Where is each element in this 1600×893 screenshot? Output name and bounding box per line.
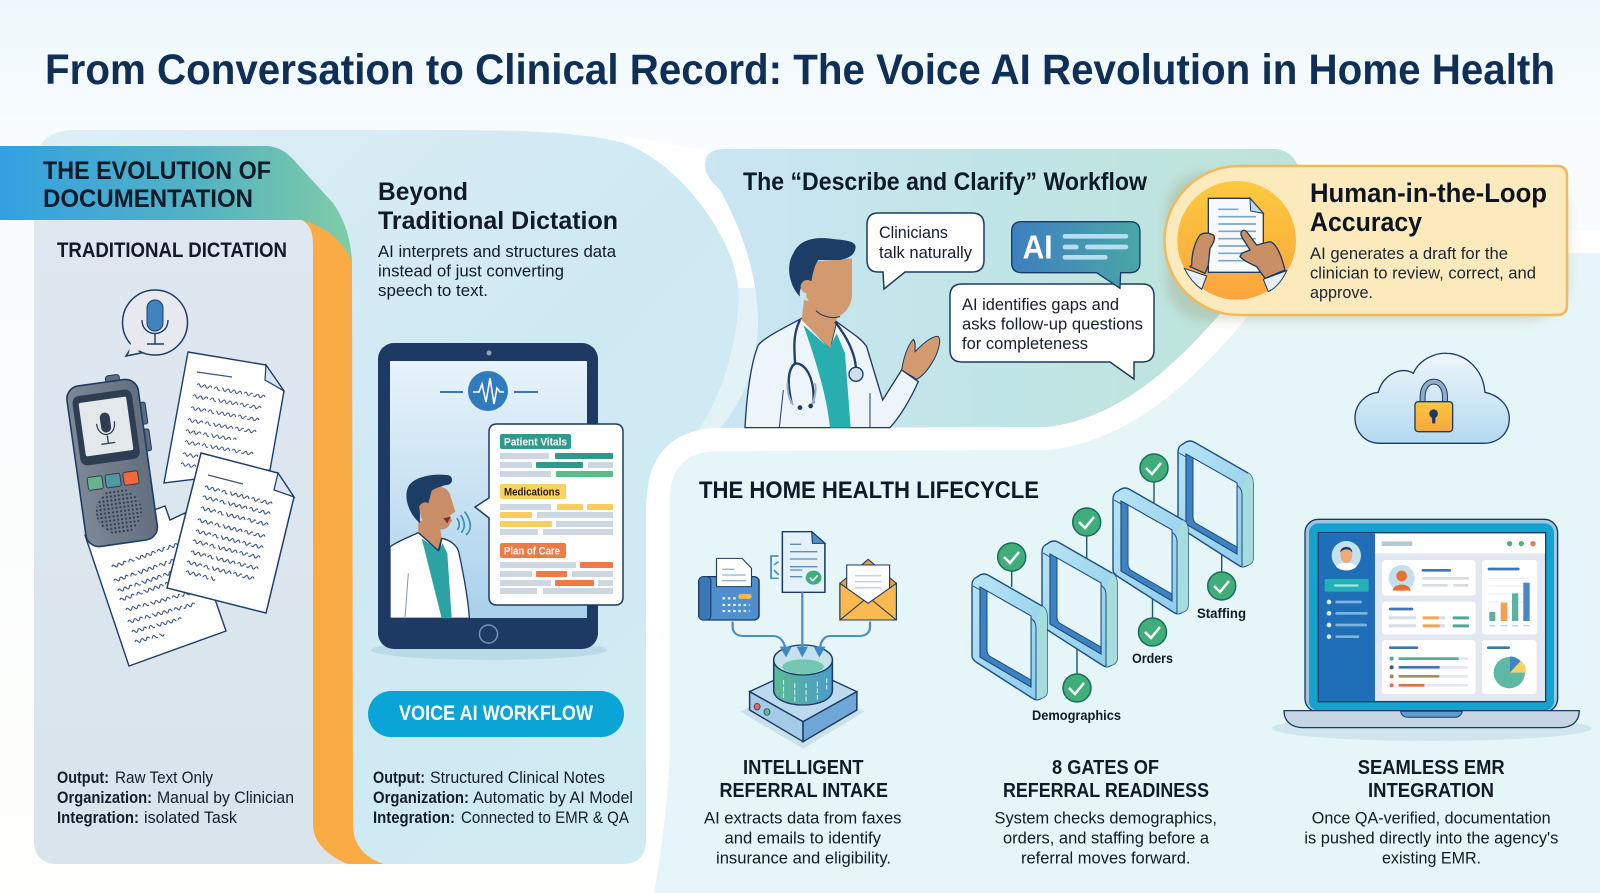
callout: ai identifies gaps <box>950 284 1154 379</box>
orange divider ribbon <box>302 220 384 864</box>
text block: voice ai attributes: Integration: <box>373 808 455 827</box>
banner: the evolution of documentation <box>0 146 352 262</box>
callout: clinicians talk naturally: Clinicians <box>879 223 948 242</box>
icon: voice waveform <box>440 371 538 411</box>
text block: intelligent referral intake: insurance and eligibility. <box>716 848 891 868</box>
button: voice ai workflow: VOICE AI WORKFLOW <box>399 702 593 725</box>
gate 3 <box>1113 488 1188 614</box>
text block: 8 gates of referral readiness: referral moves forward. <box>1021 848 1190 868</box>
text block: intelligent referral intake <box>704 757 902 868</box>
dashboard patient card <box>1382 560 1476 596</box>
icon: ai message bubble: AI <box>1023 229 1053 266</box>
text block: beyond traditional dictation: speech to text. <box>378 281 488 300</box>
panel: evolution of documentation background <box>34 130 739 864</box>
illustration: handwritten page front <box>167 453 294 613</box>
text block: traditional dictation attributes: Integration: <box>57 808 139 827</box>
banner: the evolution of documentation: DOCUMENTATION <box>43 185 253 213</box>
illustration: doctor gesturing <box>745 238 940 428</box>
gate 1 <box>972 574 1047 700</box>
label: demographics: Demographics <box>1032 707 1121 723</box>
icon: hands reviewing document <box>1177 181 1296 300</box>
panel: home health lifecycle background <box>654 253 1600 893</box>
icon: email envelope <box>840 559 896 620</box>
text block: voice ai attributes: Structured Clinical Notes <box>430 768 605 787</box>
heading: human-in-the-loop accuracy: Accuracy <box>1310 207 1422 237</box>
callout: clinicians talk naturally <box>867 213 984 289</box>
callout: ai identifies gaps: AI identifies gaps and <box>962 295 1119 314</box>
dashboard list card <box>1382 640 1476 694</box>
heading: traditional dictation: TRADITIONAL DICTATION <box>57 238 287 262</box>
icon: cloud with padlock <box>1355 353 1509 443</box>
text block: traditional dictation attributes: Manual by Clinician <box>157 788 294 807</box>
illustration: clinician speaking <box>390 475 470 618</box>
icon: dictaphone recorder <box>64 371 164 548</box>
gate 2 <box>1042 541 1117 667</box>
text block: traditional dictation attributes: Organization: <box>57 788 152 807</box>
icon: referral document <box>771 532 825 592</box>
text block: seamless emr integration: existing EMR. <box>1382 848 1481 868</box>
heading: describe and clarify workflow: The “Describe and Clarify” Workflow <box>743 168 1148 196</box>
text block: traditional dictation attributes: Output: <box>57 768 109 787</box>
text block: 8 gates of referral readiness: System checks demographics, <box>994 808 1217 828</box>
heading: human-in-the-loop accuracy <box>1310 178 1547 237</box>
text block: human review description: approve. <box>1310 283 1373 302</box>
heading: human-in-the-loop accuracy: Human-in-the-Loop <box>1310 178 1547 208</box>
text block: intelligent referral intake: and emails to identify <box>724 828 881 848</box>
panel: describe and clarify workflow background <box>705 149 1300 428</box>
arrows into database <box>733 592 870 657</box>
text block: voice ai attributes: Connected to EMR & QA <box>461 808 630 827</box>
text block: intelligent referral intake: INTELLIGENT <box>743 757 864 779</box>
text block: voice ai attributes <box>373 768 633 827</box>
text block: traditional dictation attributes <box>57 768 294 827</box>
text block: intelligent referral intake: AI extracts data from faxes <box>704 808 902 828</box>
dashboard pie chart <box>1482 640 1537 694</box>
label: medications: Medications <box>504 486 560 498</box>
text block: seamless emr integration <box>1304 757 1558 868</box>
text block: seamless emr integration: SEAMLESS EMR <box>1358 757 1505 779</box>
illustration: laptop with emr dashboard <box>1272 519 1592 741</box>
gate 4 <box>1178 441 1253 567</box>
text block: seamless emr integration: is pushed directly into the agency's <box>1304 828 1558 848</box>
button: voice ai workflow <box>368 691 624 737</box>
text block: intelligent referral intake: REFERRAL INTAKE <box>720 780 888 802</box>
icon: microphone speech bubble <box>122 290 188 356</box>
text block: traditional dictation attributes: Raw Text Only <box>115 768 213 787</box>
icon: fax machine <box>699 558 759 620</box>
illustration: handwritten page top right <box>164 352 284 483</box>
icon: ai message bubble <box>1012 222 1140 288</box>
icon: database device <box>750 645 857 742</box>
banner: the evolution of documentation: THE EVOLUTION OF <box>43 157 271 185</box>
text block: seamless emr integration: Once QA-verified, documentation <box>1312 808 1551 828</box>
text block: voice ai attributes: Automatic by AI Model <box>473 788 633 807</box>
callout: ai identifies gaps: asks follow-up questions <box>962 314 1143 334</box>
text block: traditional dictation attributes: isolated Task <box>144 808 237 827</box>
text block: 8 gates of referral readiness: REFERRAL READINESS <box>1003 780 1209 802</box>
card: structured notes <box>475 424 623 605</box>
text block: human review description <box>1310 244 1536 302</box>
text block: seamless emr integration: INTEGRATION <box>1368 780 1494 802</box>
label: orders: Orders <box>1132 650 1173 666</box>
text block: human review description: AI generates a draft for the <box>1310 244 1508 263</box>
illustration: 8 gates of referral readiness <box>972 441 1253 723</box>
callout: ai identifies gaps: for completeness <box>962 334 1088 353</box>
text block: 8 gates of referral readiness: 8 GATES OF <box>1052 757 1159 779</box>
text block: beyond traditional dictation: Traditional Dictation <box>378 207 618 235</box>
dashboard orders card <box>1382 602 1476 634</box>
text block: beyond traditional dictation <box>378 178 618 300</box>
label: patient vitals: Patient Vitals <box>504 436 567 448</box>
text block: beyond traditional dictation: AI interprets and structures data <box>378 242 617 261</box>
heading: the home health lifecycle: THE HOME HEALTH LIFECYCLE <box>699 477 1039 504</box>
label: staffing: Staffing <box>1197 605 1246 621</box>
text block: voice ai attributes: Output: <box>373 768 425 787</box>
text block: 8 gates of referral readiness: orders, and staffing before a <box>1003 828 1210 848</box>
text block: 8 gates of referral readiness <box>994 757 1217 868</box>
sidebar profile and menu <box>1325 541 1369 639</box>
callout: clinicians talk naturally: talk naturally <box>879 243 972 262</box>
panel: human-in-the-loop accuracy <box>1164 166 1569 321</box>
illustration: tablet with structured notes <box>371 343 623 660</box>
label: plan of care: Plan of Care <box>504 546 560 558</box>
text block: beyond traditional dictation: instead of just converting <box>378 262 564 280</box>
illustration: intelligent referral intake <box>699 532 896 749</box>
illustration: handwritten page bottom <box>85 506 226 666</box>
panel: traditional dictation <box>0 146 384 864</box>
text block: beyond traditional dictation: Beyond <box>378 178 468 206</box>
dashboard bar chart <box>1482 560 1537 634</box>
text block: human review description: clinician to review, correct, and <box>1310 264 1536 282</box>
text block: voice ai attributes: Organization: <box>373 788 469 807</box>
